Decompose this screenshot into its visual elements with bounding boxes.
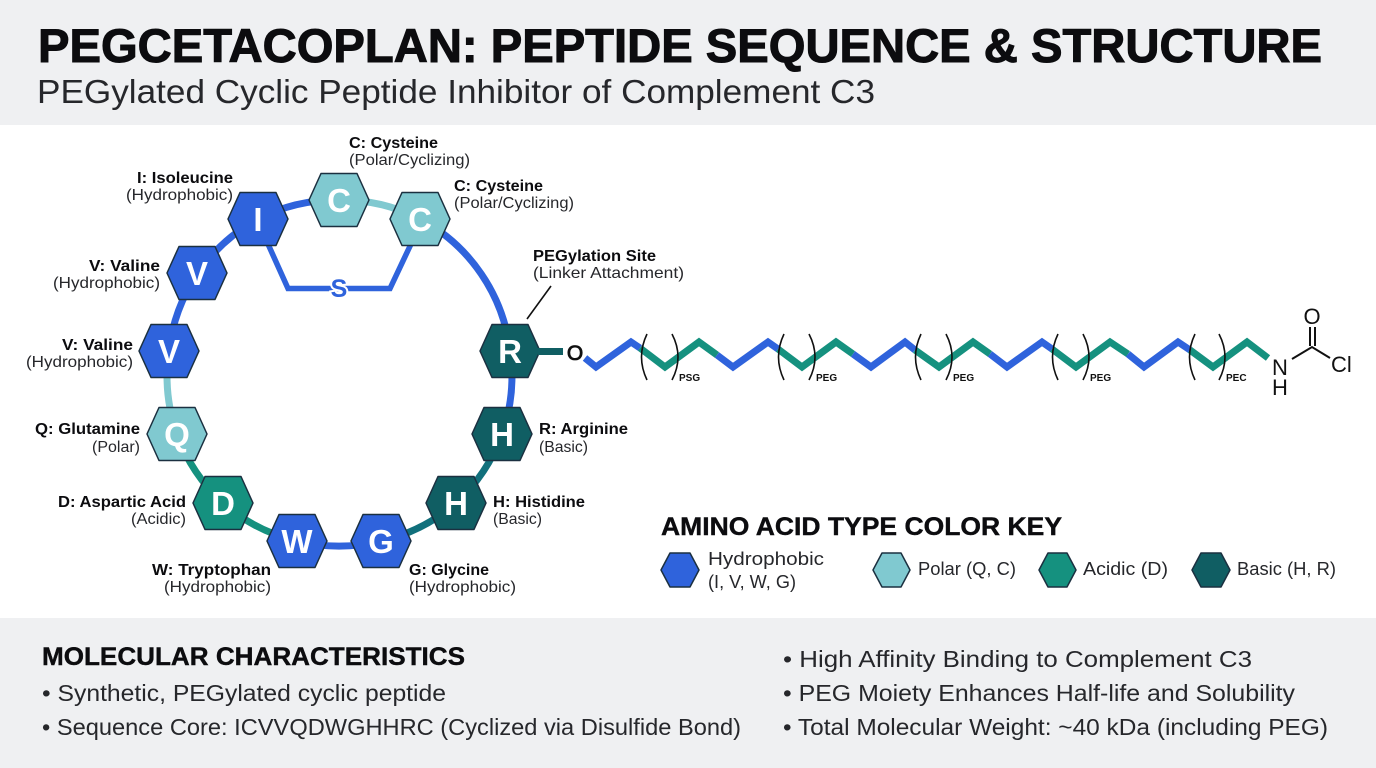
label: PEGylation site: (Linker Attachment) [533,265,684,282]
residue: D [193,476,253,530]
disulfide bridge: S [331,275,347,303]
residue: W: W [281,523,313,560]
subtitle: PEGylated Cyclic Peptide Inhibitor of Complement C3 [37,73,875,110]
residue: C: C [408,201,432,238]
header band [0,0,1376,125]
label: arginine [539,421,628,456]
linker from arginine to oxygen: O [567,342,583,365]
key item: hydrophobic: Hydrophobic [708,549,824,569]
label: cysteine right [454,178,574,212]
PEG repeat bracket 2: PEG [816,373,837,384]
PEG repeat bracket 4 [1052,334,1111,384]
key item: acidic: Acidic (D) [1083,559,1168,579]
residue: R [480,324,540,378]
characteristics list left: • Sequence Core: ICVVQDWGHHRC (Cyclized via Disulfide Bond) [42,714,741,740]
residue: Q: Q [164,416,190,453]
key item: polar [873,553,1016,587]
label: aspartic acid: (Acidic) [131,511,186,528]
label: PEGylation site: PEGylation Site [533,248,656,265]
label: valine upper: V: Valine [89,258,160,275]
residue: C: C [327,182,351,219]
residue: H [426,476,486,530]
residue: G [351,514,411,568]
residue: Q [147,408,207,460]
residue: C [309,174,369,226]
characteristics list right: • Total Molecular Weight: ~40 kDa (including PEG) [783,714,1328,740]
label: histidine [493,494,585,528]
residue: I: I [253,201,263,238]
PEG repeat bracket 5 [1190,334,1247,384]
residue: D: D [211,485,235,522]
label: valine lower: V: Valine [62,337,133,354]
label: cysteine top [349,135,470,169]
footer band [0,618,1376,768]
PEG repeat bracket 1: PSG [679,373,700,384]
label: cysteine top: (Polar/Cyclizing) [349,152,470,169]
label: valine upper [53,258,160,292]
title: PEGCETACOPLAN: PEPTIDE SEQUENCE & STRUCTURE [38,19,1322,72]
disulfide bridge [268,244,411,303]
molecular characteristics heading: MOLECULAR CHARACTERISTICS [42,643,465,671]
label: cysteine right: (Polar/Cyclizing) [454,195,574,212]
label: glycine: (Hydrophobic) [409,579,516,596]
key item: basic: Basic (H, R) [1237,559,1336,579]
label: glycine [409,562,516,596]
residue: H: H [490,416,514,453]
terminal carbamoyl chloride group: Cl [1331,352,1352,377]
characteristics list left [42,680,741,740]
PEG repeat bracket 1 [642,334,700,384]
label: tryptophan [152,562,271,596]
characteristics list right [783,646,1328,740]
label: valine lower [26,337,133,371]
terminal carbamoyl chloride group [1272,304,1352,400]
leader line to PEGylation site [527,286,551,319]
key item: basic [1192,553,1336,587]
terminal carbamoyl chloride group: O [1303,304,1321,329]
residue: V: V [158,333,180,370]
label: valine upper: (Hydrophobic) [53,275,160,292]
key item: acidic [1039,553,1168,587]
label: cysteine right: C: Cysteine [454,178,543,195]
residue: I [228,192,288,246]
label: PEGylation site [533,248,684,282]
label: glutamine: Q: Glutamine [35,421,140,438]
cyclic peptide ring [167,200,512,546]
label: isoleucine: (Hydrophobic) [126,187,233,204]
label: glutamine [35,421,140,456]
terminal carbamoyl chloride group: H [1272,375,1288,400]
residue: H [472,408,532,460]
PEG repeat bracket 2 [778,334,837,384]
residue: V [167,246,227,300]
PEG repeat bracket 4: PEG [1090,373,1111,384]
label: aspartic acid: D: Aspartic Acid [58,494,186,511]
key item: polar: Polar (Q, C) [918,559,1016,579]
residue: G: G [368,523,394,560]
residue: C [390,192,450,246]
residue: R: R [498,333,522,370]
label: arginine: (Basic) [539,439,588,456]
label: isoleucine: I: Isoleucine [137,170,233,187]
label: cysteine top: C: Cysteine [349,135,438,152]
label: isoleucine [126,170,233,204]
PEG repeat bracket 5: PEC [1226,373,1247,384]
PEG repeat bracket 3: PEG [953,373,974,384]
residue: H: H [444,485,468,522]
residue: W [267,514,327,568]
label: histidine: (Basic) [493,511,542,528]
label: glutamine: (Polar) [92,439,140,456]
PEG repeat bracket 3 [916,334,974,384]
linker from arginine to oxygen [538,342,583,365]
characteristics list left: • Synthetic, PEGylated cyclic peptide [42,680,446,706]
PEG chain [585,342,1268,367]
label: tryptophan: (Hydrophobic) [164,579,271,596]
residue: V: V [186,255,208,292]
characteristics list right: • High Affinity Binding to Complement C3 [783,646,1252,672]
label: glycine: G: Glycine [409,562,489,579]
label: valine lower: (Hydrophobic) [26,354,133,371]
key item: hydrophobic [661,549,824,592]
residue: V [139,324,199,378]
label: tryptophan: W: Tryptophan [152,562,271,579]
color key heading: AMINO ACID TYPE COLOR KEY [661,513,1062,541]
label: aspartic acid [58,494,186,528]
label: arginine: R: Arginine [539,421,628,438]
terminal carbamoyl chloride group: N [1272,355,1288,380]
label: histidine: H: Histidine [493,494,585,511]
key item: hydrophobic: (I, V, W, G) [708,572,796,592]
characteristics list right: • PEG Moiety Enhances Half-life and Solubility [783,680,1296,706]
